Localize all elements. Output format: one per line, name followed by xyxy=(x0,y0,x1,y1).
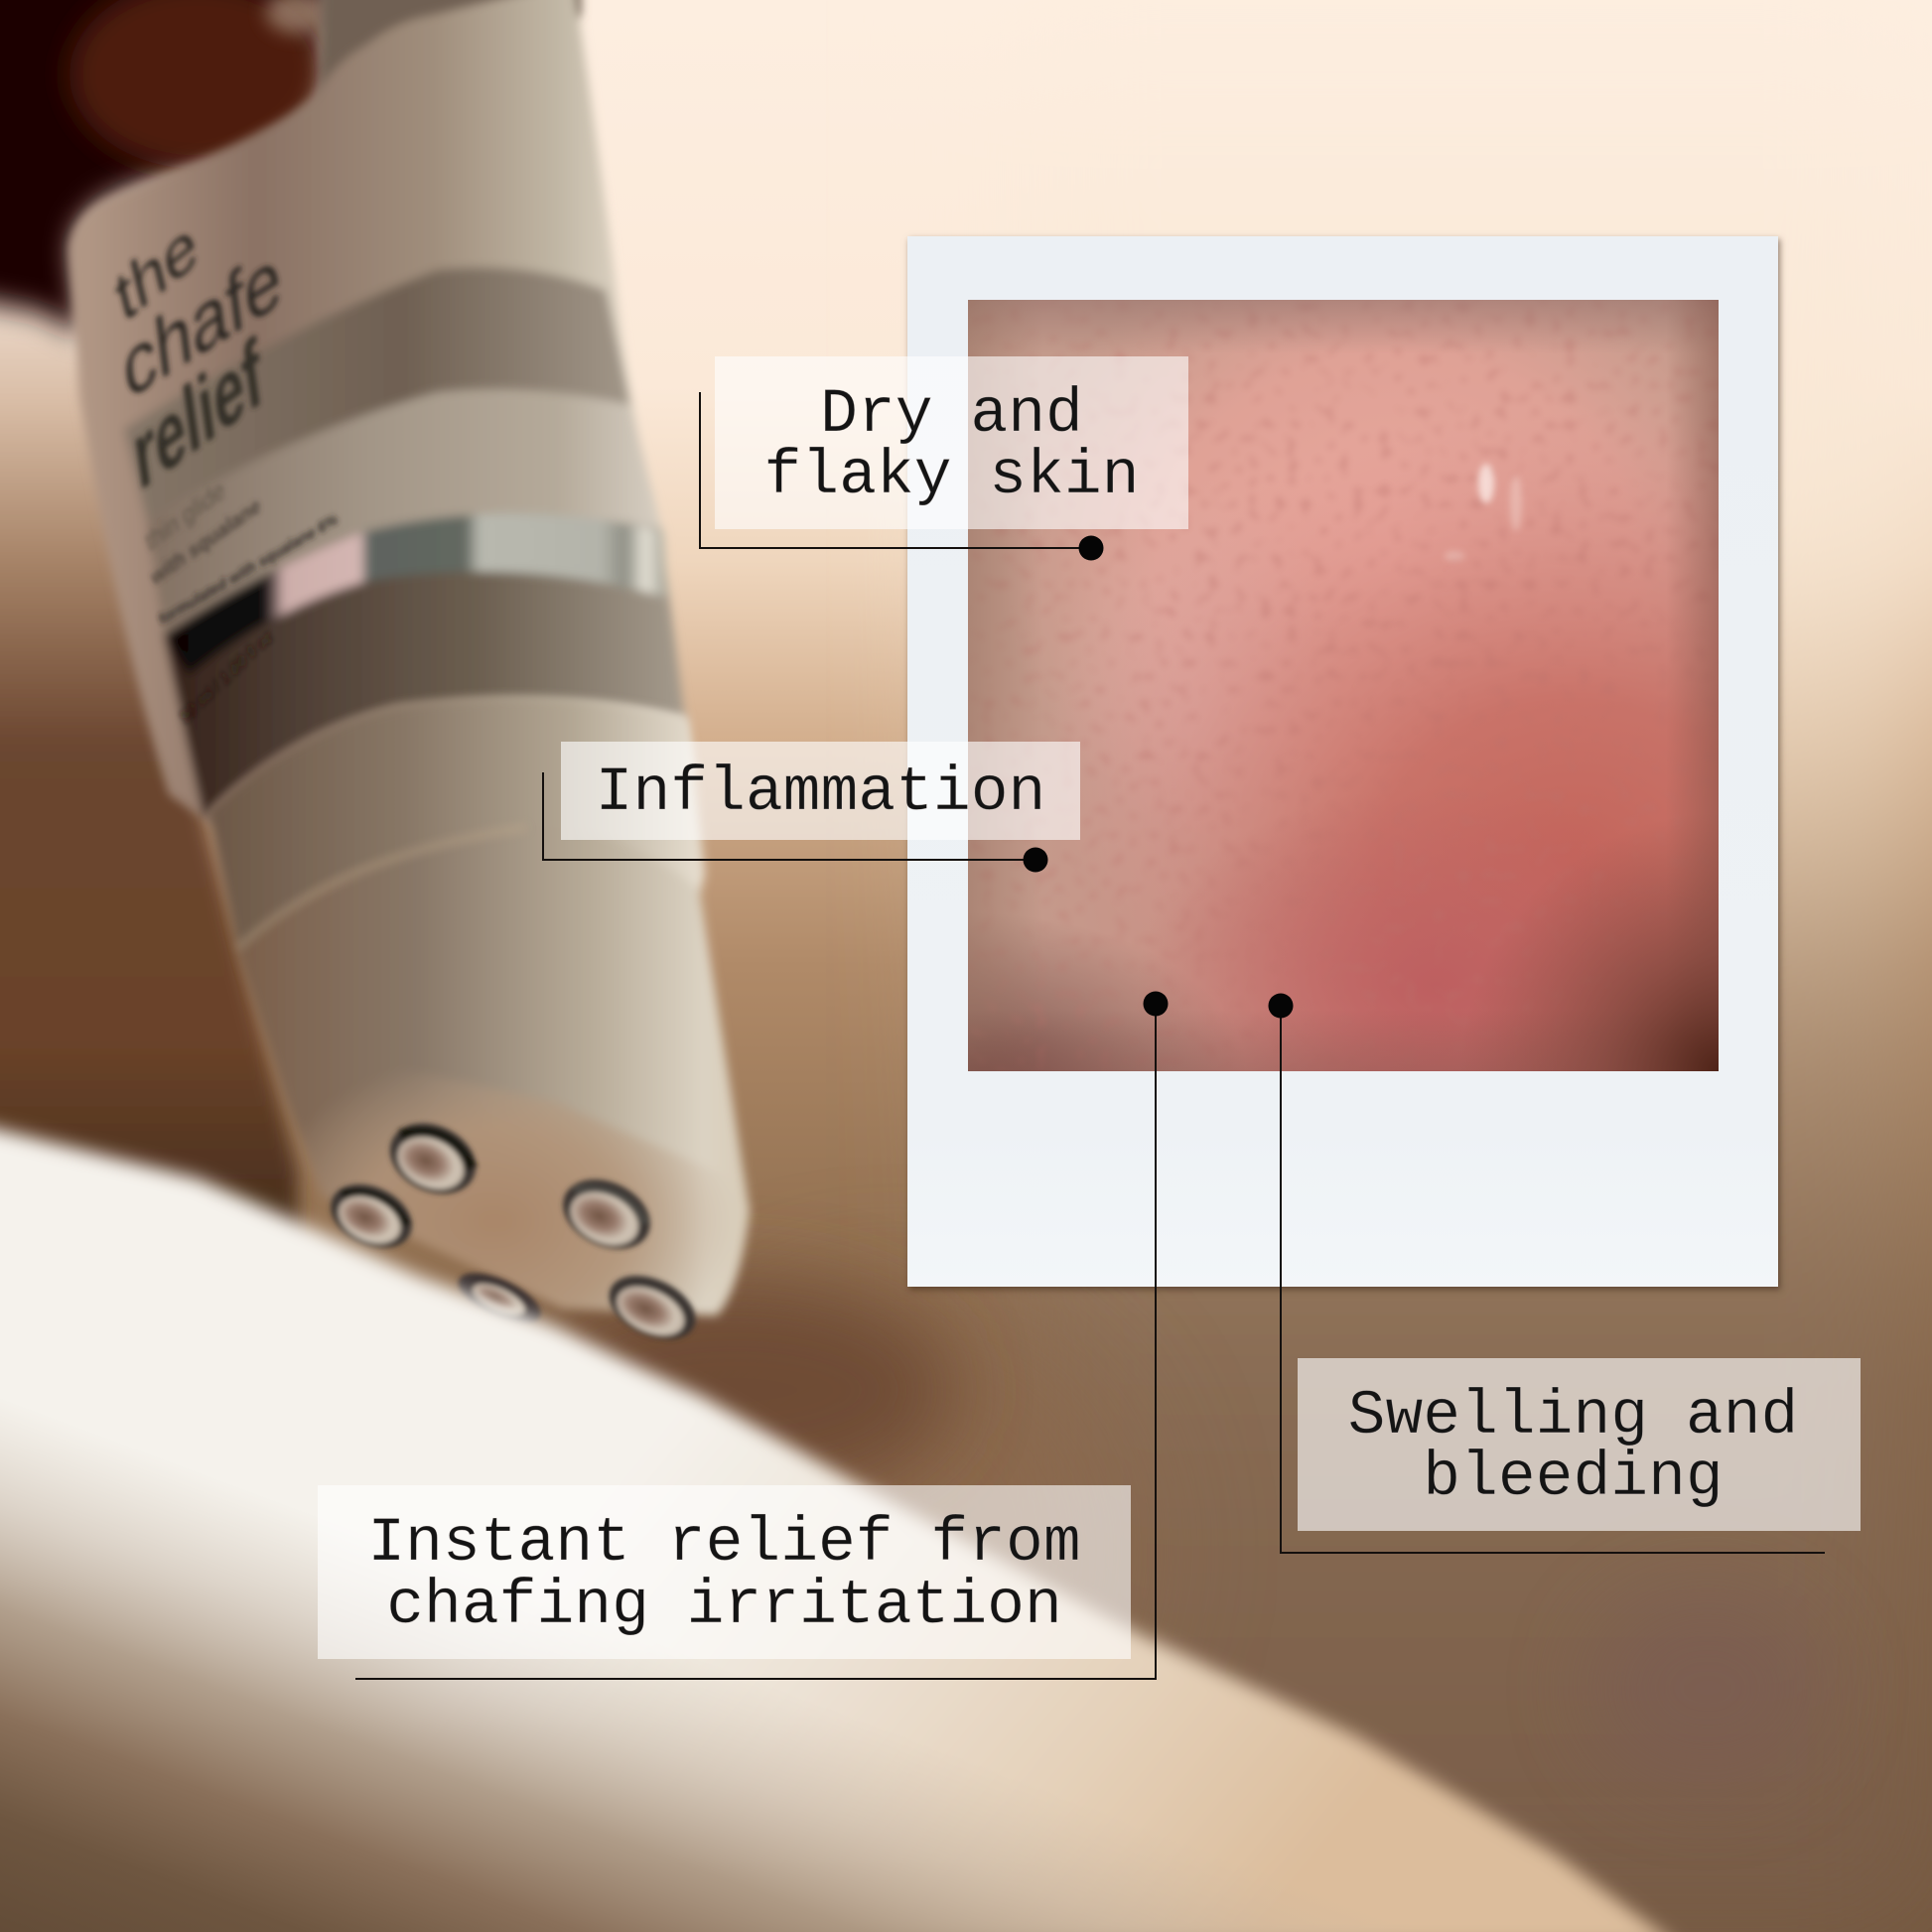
tube label text xyxy=(108,204,340,729)
callout line: dry and flaky skin xyxy=(700,392,1104,560)
tube label text: formulated with squalane 6% xyxy=(158,510,340,629)
label: instant relief headline: Instant relief from chafing irritation xyxy=(367,1508,1081,1640)
foreground blurred arm xyxy=(0,1120,1678,1932)
tube label text: with squalane xyxy=(148,492,263,592)
label: dry and flaky skin xyxy=(715,356,1188,529)
tube neck and roller head xyxy=(208,698,750,1315)
tube label text: chafe xyxy=(118,228,286,418)
callout line: inflammation xyxy=(543,772,1048,872)
label: inflammation: Inflammation xyxy=(596,758,1045,828)
panel: polaroid frame with skin photo xyxy=(907,236,1778,1287)
tube label text: relief xyxy=(127,318,268,512)
callout line: instant relief xyxy=(355,991,1168,1679)
label: swelling and bleeding: Swelling and bleeding xyxy=(1348,1380,1798,1513)
hand at top-left xyxy=(0,0,338,338)
label: swelling and bleeding xyxy=(1298,1358,1861,1531)
tube label text: the xyxy=(108,204,204,338)
label: instant relief headline xyxy=(318,1485,1131,1659)
left arm shape xyxy=(0,303,298,1291)
label: dry and flaky skin: Dry and flaky skin xyxy=(763,379,1140,511)
product tube xyxy=(69,0,750,1352)
photo: irritated skin close-up xyxy=(968,300,1719,1071)
callout line: swelling and bleeding xyxy=(1269,993,1825,1553)
tube label text: 50 ml / 1.69 fl oz xyxy=(177,624,276,729)
label: inflammation xyxy=(561,742,1080,840)
roller balls xyxy=(321,1110,706,1352)
tube label text: thin glide xyxy=(143,476,227,558)
